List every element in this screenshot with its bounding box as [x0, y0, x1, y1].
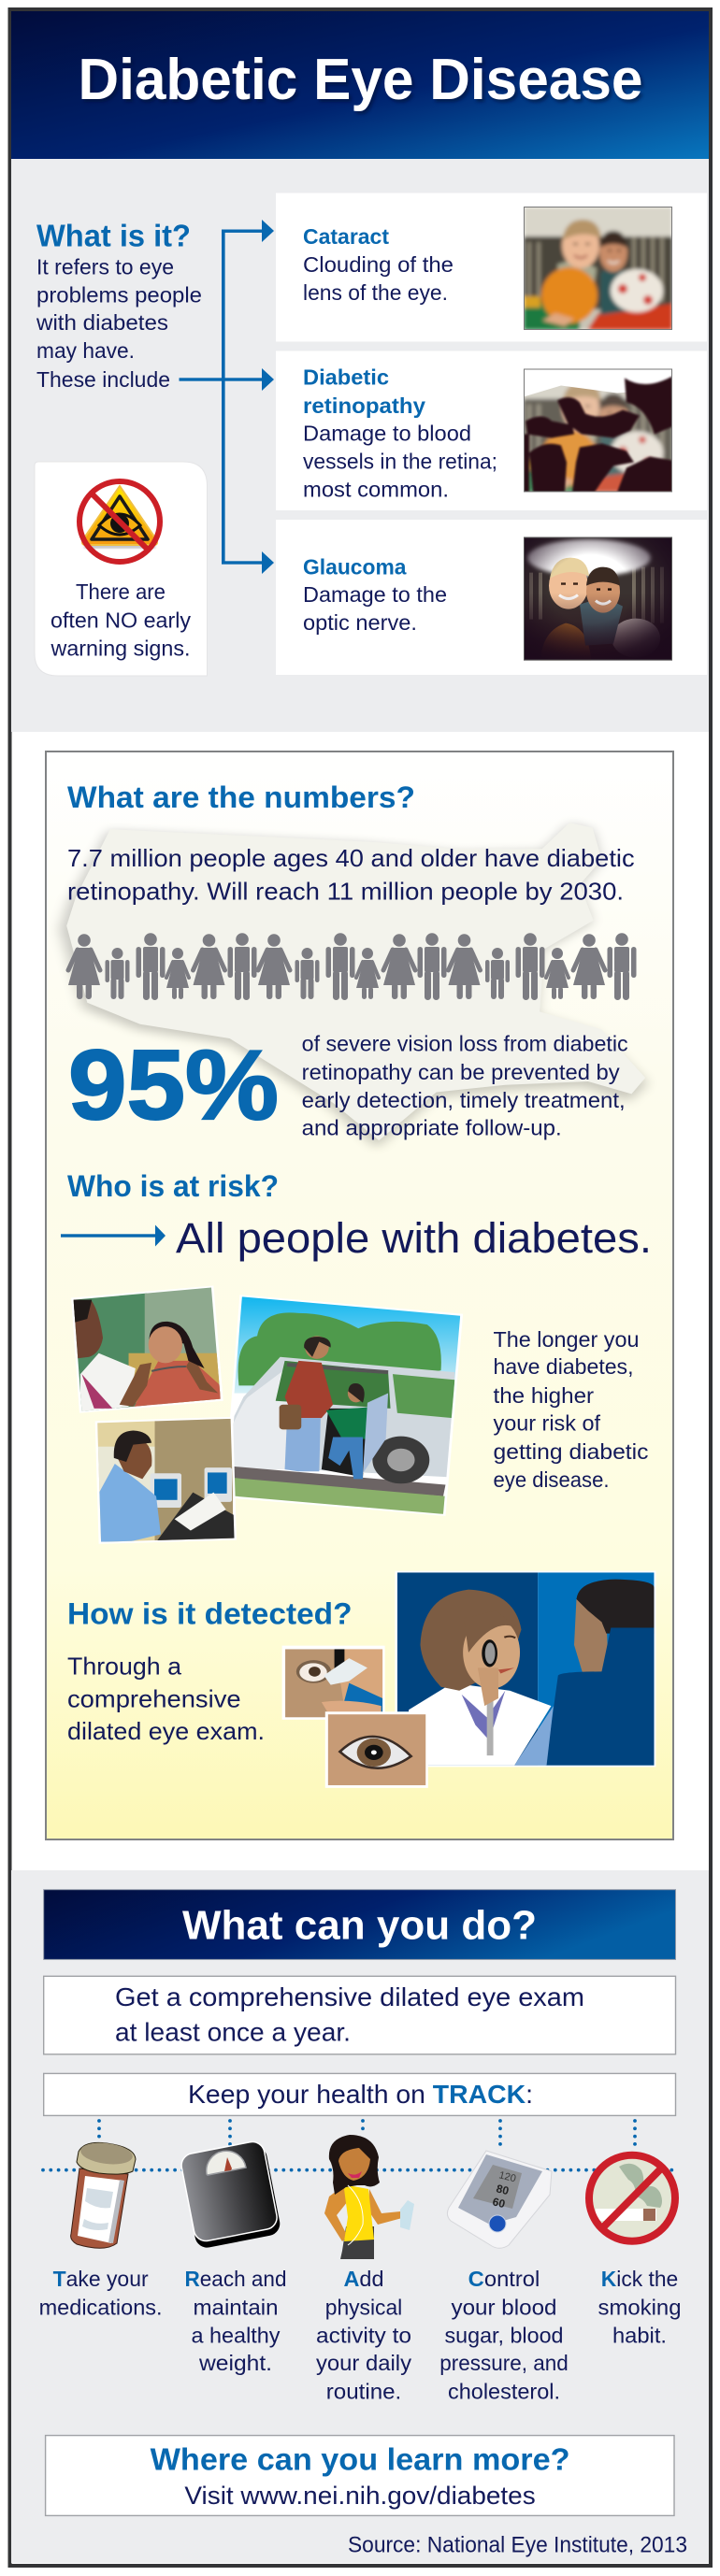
icon: blood pressure monitor: [447, 2151, 552, 2248]
text: dilated exam: Through a: [67, 1652, 182, 1680]
map of the United States: [60, 823, 648, 1148]
box: yearly exam: [44, 1976, 675, 2054]
text: definition: [36, 254, 202, 392]
caption: kick smoking: habit.: [612, 2323, 667, 2347]
icon: blood pressure monitor: 120: [497, 2169, 517, 2184]
caption: add physical activity: routine.: [326, 2380, 401, 2404]
text: cataract: [303, 224, 454, 305]
text: warning: There are: [76, 580, 166, 604]
arrows to conditions: [180, 220, 274, 574]
callout: no early warning signs: [35, 462, 208, 676]
text: definition: may have.: [36, 338, 135, 363]
text: longer you have diabetes: [494, 1327, 649, 1492]
text: longer you have diabetes: have diabetes,: [494, 1354, 634, 1379]
box: learn more: Where can you learn more?: [151, 2442, 570, 2477]
card: diabetic retinopathy: [276, 351, 707, 510]
text: 95 percent explanation: of severe vision loss from diabetic: [302, 1031, 628, 1055]
banner heading: What can you do?: [182, 1903, 537, 1949]
illustration: doctor and patient: [69, 1282, 223, 1416]
icon: pill bottle: [71, 2140, 136, 2248]
caption: add physical activity: Add: [344, 2267, 383, 2291]
text: cataract: Clouding of the: [303, 252, 454, 277]
text: glaucoma: [303, 554, 447, 635]
text: diabetic retinopathy: [303, 365, 497, 501]
box: keep health on track: Keep your health on TRACK:: [188, 2080, 533, 2109]
caption: control blood sugar: Control: [468, 2267, 540, 2291]
text: dilated exam: dilated eye exam.: [67, 1717, 265, 1745]
caption: kick smoking: Kick the: [601, 2267, 678, 2291]
text: dilated exam: comprehensive: [67, 1684, 241, 1712]
text: diabetic retinopathy: retinopathy: [303, 394, 425, 418]
text: longer you have diabetes: eye disease.: [494, 1467, 610, 1492]
caption: add physical activity: activity to: [316, 2323, 411, 2347]
text: dilated exam: [67, 1652, 265, 1745]
icon: bathroom scale: [180, 2140, 282, 2250]
text: 95 percent explanation: [302, 1031, 628, 1140]
stat: 95 percent: 95%: [68, 1030, 279, 1140]
illustration: dilated eye: [325, 1711, 428, 1788]
box: yearly exam: at least once a year.: [115, 2018, 351, 2047]
caption: take medications: medications.: [39, 2295, 163, 2319]
text: all people with diabetes: All people with diabetes.: [176, 1214, 652, 1262]
caption: kick smoking: smoking: [598, 2295, 681, 2319]
caption: control blood sugar: your blood: [451, 2295, 557, 2319]
box: learn more: [46, 2436, 674, 2515]
text: cataract: lens of the eye.: [303, 280, 448, 305]
heading: who is at risk: Who is at risk?: [67, 1169, 279, 1203]
caption: take medications: [39, 2267, 163, 2319]
source credit: Source: National Eye Institute, 2013: [348, 2533, 687, 2558]
illustration: man reading report: [94, 1417, 237, 1548]
caption: control blood sugar: pressure, and: [439, 2351, 569, 2375]
panel: what can you do: [11, 1870, 709, 2563]
pictogram: row of people: [68, 933, 636, 1000]
text: glaucoma: optic nerve.: [303, 610, 417, 635]
caption: kick smoking: [598, 2267, 681, 2347]
text: definition: These include: [36, 367, 170, 392]
icon: woman exercising: [324, 2135, 414, 2259]
arrow: risk: [61, 1224, 166, 1247]
text: diabetic retinopathy: most common.: [303, 477, 449, 501]
text: warning: often NO early: [50, 608, 191, 633]
text: diabetic retinopathy: Diabetic: [303, 365, 389, 389]
text: cataract: Cataract: [303, 224, 389, 249]
caption: take medications: Take your: [53, 2267, 149, 2291]
icon: blood pressure monitor: 80: [495, 2182, 511, 2197]
caption: reach healthy weight: a healthy: [191, 2323, 281, 2347]
heading: what is it: What is it?: [36, 219, 191, 252]
caption: add physical activity: your daily: [316, 2351, 412, 2375]
caption: control blood sugar: [439, 2267, 569, 2404]
caption: add physical activity: physical: [325, 2295, 402, 2319]
caption: reach healthy weight: Reach and: [185, 2267, 286, 2291]
dotted connectors: [43, 2121, 677, 2170]
banner: what can you do: [44, 1890, 675, 1959]
text: 95 percent explanation: early detection, timely treatment,: [302, 1088, 626, 1112]
text: 7.7 million: retinopathy. Will reach 11 million people by 2030.: [67, 877, 624, 905]
text: 95 percent explanation: retinopathy can be prevented by: [302, 1060, 620, 1084]
text: longer you have diabetes: the higher: [494, 1383, 594, 1408]
icon: no smoking: [589, 2155, 675, 2241]
text: diabetic retinopathy: Damage to blood: [303, 422, 471, 446]
box: learn more: Visit www.nei.nih.gov/diabetes: [184, 2482, 536, 2510]
heading: numbers: What are the numbers?: [67, 780, 415, 814]
caption: add physical activity: [316, 2267, 412, 2404]
text: definition: It refers to eye: [36, 254, 174, 279]
illustration: eye doctor: [395, 1571, 655, 1767]
text: 7.7 million: 7.7 million people ages 40 and older have diabetic: [67, 844, 635, 872]
header banner: [11, 11, 709, 159]
illustration: woman and boy at van: [221, 1294, 464, 1516]
illustrations: risk scenes: [69, 1282, 464, 1548]
title: Diabetic Eye Disease: [80, 50, 645, 115]
text: warning: [50, 580, 191, 660]
box: keep health on track: [44, 2073, 675, 2115]
panel: numbers, risk and detection: [46, 751, 673, 1839]
icon: blood pressure monitor: 60: [491, 2195, 507, 2211]
caption: reach healthy weight: [185, 2267, 286, 2375]
text: 7.7 million: [67, 844, 635, 905]
caption: control blood sugar: cholesterol.: [448, 2380, 560, 2404]
text: glaucoma: Glaucoma: [303, 554, 407, 579]
text: longer you have diabetes: The longer you: [494, 1327, 640, 1352]
card: cataract: [276, 193, 707, 342]
box: yearly exam: Get a comprehensive dilated eye exam: [115, 1982, 584, 2011]
text: glaucoma: Damage to the: [303, 582, 447, 607]
text: longer you have diabetes: getting diabetic: [494, 1439, 649, 1464]
title: Diabetic Eye Disease: [79, 48, 643, 112]
caption: reach healthy weight: maintain: [193, 2295, 279, 2319]
heading: how is it detected: How is it detected?: [67, 1597, 352, 1631]
text: warning: warning signs.: [50, 636, 191, 660]
text: definition: problems people: [36, 282, 202, 307]
icon: crossed-out warning eye: [79, 481, 160, 562]
panel: what is it: [11, 159, 709, 732]
text: 95 percent explanation: and appropriate follow-up.: [302, 1116, 562, 1140]
text: longer you have diabetes: your risk of: [494, 1411, 601, 1436]
photo: retinopathy view: [524, 368, 672, 492]
text: definition: with diabetes: [36, 310, 168, 335]
caption: control blood sugar: sugar, blood: [445, 2323, 563, 2347]
card: glaucoma: [276, 520, 707, 675]
photo: glaucoma view: [524, 537, 672, 661]
photo: cataract view: [524, 207, 672, 330]
illustration: eye drops: [282, 1646, 385, 1720]
text: diabetic retinopathy: vessels in the retina;: [303, 449, 497, 473]
illustrations: eye exam: [282, 1571, 655, 1788]
caption: reach healthy weight: weight.: [198, 2351, 272, 2375]
